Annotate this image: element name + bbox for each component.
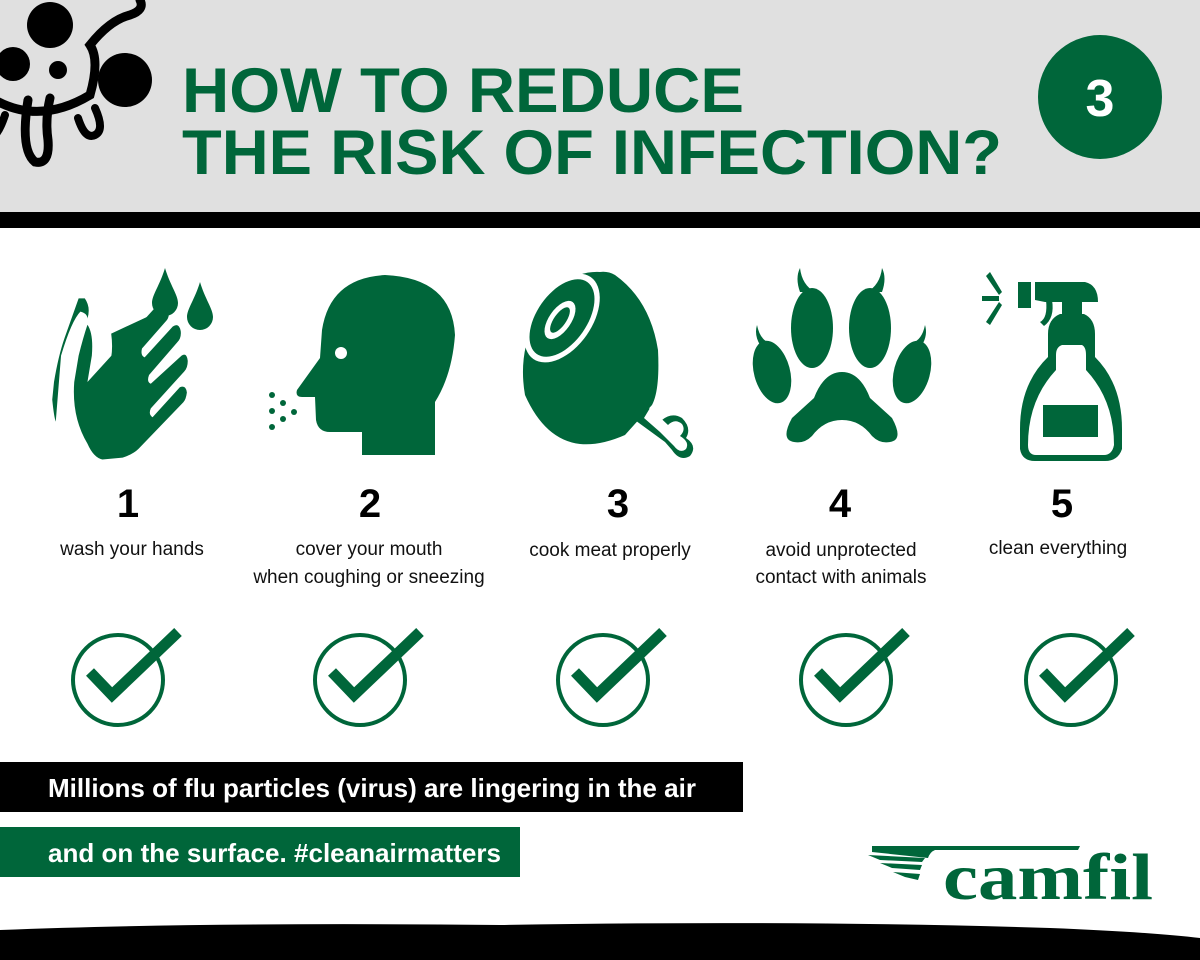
title: THE RISK OF INFECTION? (182, 118, 1002, 188)
step labels: wash your hands (59, 539, 204, 560)
step labels: cover your mouth (296, 539, 442, 560)
title (182, 56, 1002, 188)
check marks (73, 632, 1131, 725)
icon: head sneezing (269, 275, 455, 455)
title: HOW TO REDUCE (182, 56, 744, 126)
step labels (59, 538, 1127, 588)
icon: virus (0, 0, 152, 162)
step numbers: 4 (829, 482, 852, 526)
icon: spray bottle (982, 272, 1122, 461)
icon: hand washing (52, 268, 213, 459)
bottom brush stroke (0, 923, 1200, 960)
banner line 1 (0, 762, 743, 812)
step labels: when coughing or sneezing (252, 567, 485, 588)
header background (0, 0, 1200, 228)
step labels: clean everything (989, 538, 1127, 559)
badge: number 3: 3 (1086, 70, 1114, 128)
step numbers: 3 (607, 482, 629, 526)
banner line 2 (0, 827, 520, 877)
banner line 2: and on the surface. #cleanairmatters (48, 838, 501, 868)
logo: camfil (868, 841, 1153, 914)
step labels: contact with animals (755, 567, 927, 588)
icon: meat leg (509, 260, 693, 458)
step numbers: 2 (359, 482, 381, 526)
logo: camfil: camfil (943, 841, 1153, 914)
badge: number 3 (1038, 35, 1162, 159)
step numbers (117, 482, 1073, 526)
icon: paw (746, 268, 938, 442)
step numbers: 1 (117, 482, 139, 526)
step labels: avoid unprotected (765, 540, 917, 561)
step labels: cook meat properly (529, 540, 691, 561)
banner line 1: Millions of flu particles (virus) are lingering in the air (48, 773, 696, 803)
step numbers: 5 (1051, 482, 1073, 526)
